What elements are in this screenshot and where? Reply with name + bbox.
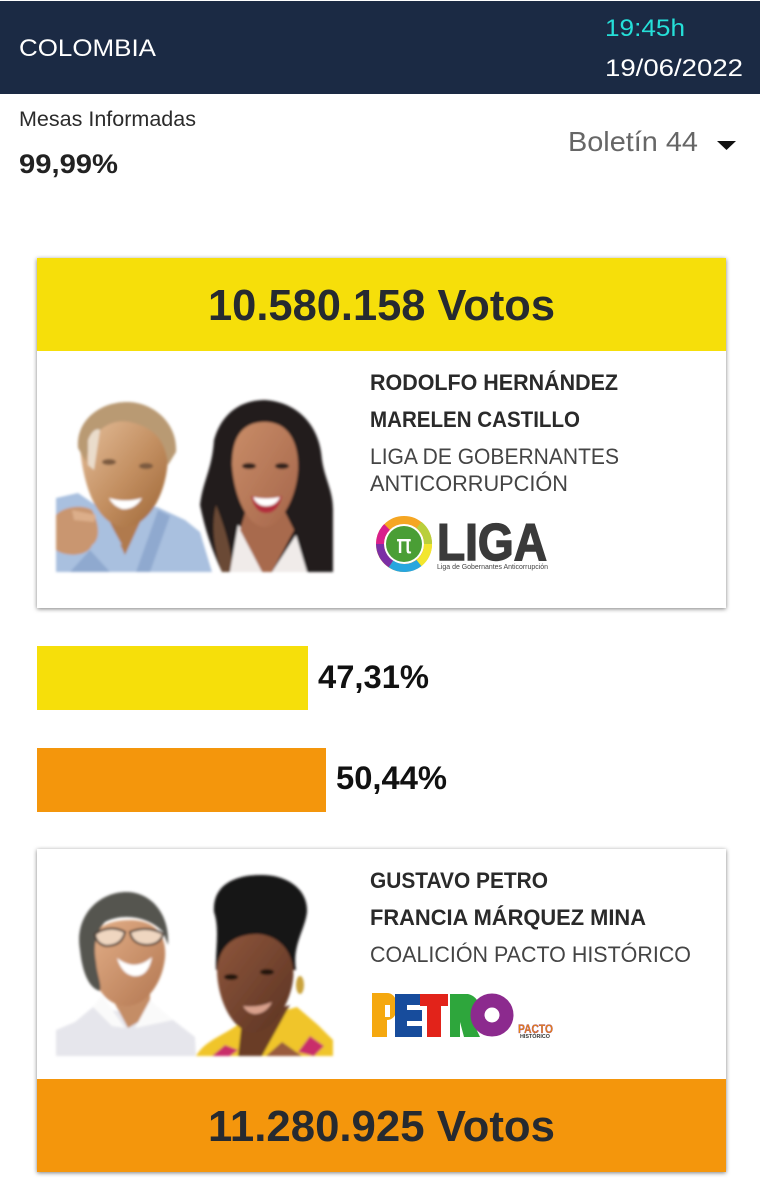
bar: Petro percentage: 50,44% — [336, 760, 447, 796]
panel: Hernández card — [37, 258, 726, 608]
icon: Francia Márquez portrait — [196, 875, 333, 1056]
Hernández candidate names: RODOLFO HERNÁNDEZ — [370, 370, 618, 395]
icon: Liga logo: LIGA — [437, 514, 547, 572]
icon: Liga logo: Liga de Gobernantes Anticorrupción — [437, 562, 548, 571]
bar: Petro percentage — [37, 748, 447, 812]
Petro candidate names: FRANCIA MÁRQUEZ MINA — [370, 905, 646, 930]
status label: Mesas Informadas — [19, 108, 196, 131]
date: 19/06/2022 — [605, 55, 743, 82]
Hernández candidate names: LIGA DE GOBERNANTES — [370, 444, 619, 469]
bar: Hernández percentage: 47,31% — [318, 659, 429, 695]
icon: Rodolfo Hernández portrait — [56, 402, 212, 572]
icon: Gustavo Petro portrait — [56, 892, 196, 1056]
icon: Petro logo: HISTÓRICO — [520, 1032, 550, 1040]
Hernández candidate names: ANTICORRUPCIÓN — [370, 471, 568, 496]
icon: dropdown arrow — [717, 141, 736, 150]
Hernández vote banner — [37, 258, 726, 351]
Petro vote banner — [37, 1079, 726, 1172]
Petro candidate names: COALICIÓN PACTO HISTÓRICO — [370, 942, 691, 967]
header bar — [0, 1, 760, 94]
bar: Hernández percentage — [37, 646, 429, 710]
reporting status — [19, 108, 196, 179]
time: 19:45h — [605, 15, 685, 42]
icon: Liga logo — [380, 514, 548, 572]
Hernández candidate names — [370, 370, 619, 496]
icon: Petro logo: PACTO — [518, 1022, 553, 1036]
icon: Petro logo — [372, 993, 553, 1040]
Petro candidate names: GUSTAVO PETRO — [370, 868, 548, 893]
status percentage: 99,99% — [19, 149, 118, 179]
panel: Petro card — [37, 849, 726, 1172]
bulletin selector: Boletín 44 — [568, 126, 698, 157]
country label: COLOMBIA — [19, 35, 156, 62]
Petro vote banner: 11.280.925 Votos — [208, 1102, 555, 1151]
icon: Marelen Castillo portrait — [200, 400, 333, 572]
icon: Liga logo: π — [396, 530, 412, 560]
Petro candidate names — [370, 868, 691, 967]
Hernández vote banner: 10.580.158 Votos — [208, 281, 555, 330]
Hernández candidate names: MARELEN CASTILLO — [370, 407, 580, 432]
